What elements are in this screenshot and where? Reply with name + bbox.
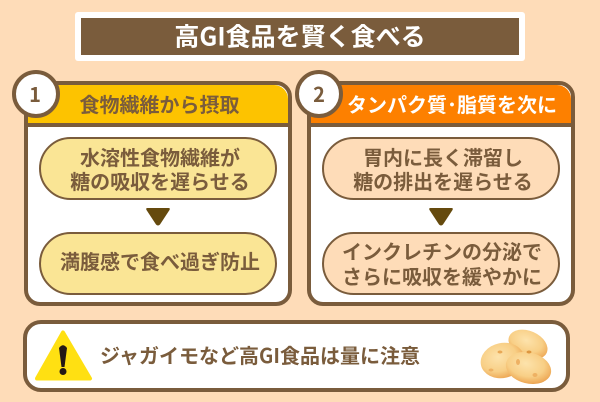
number badge 2 — [297, 72, 341, 116]
panel: protein and fat — [297, 72, 573, 304]
pill: soluble fiber — [40, 138, 276, 199]
panel header: protein and fat — [309, 85, 573, 127]
pill: stays in stomach: 糖の排出を遅らせる — [353, 166, 533, 195]
panel: dietary fiber — [14, 72, 290, 304]
pill: soluble fiber: 水溶性食物繊維が — [80, 142, 240, 171]
pill: soluble fiber: 糖の吸収を遅らせる — [70, 166, 250, 195]
pill: prevents overeating: 満腹感で食べ過ぎ防止 — [60, 246, 260, 275]
arrow down — [429, 208, 453, 226]
number badge 1: 1 — [29, 79, 41, 108]
panel header: protein and fat: タンパク質･脂質を次に — [347, 89, 557, 118]
pill: prevents overeating — [40, 233, 276, 294]
pill: stays in stomach — [323, 138, 559, 199]
number badge 1 — [14, 72, 58, 116]
panel header: dietary fiber — [26, 85, 290, 127]
pill: incretin secretion — [323, 233, 559, 294]
number badge 2: 2 — [313, 79, 325, 108]
caution text: ジャガイモなど高GI食品は量に注意 — [100, 340, 420, 369]
title — [75, 12, 525, 61]
panel: caution — [25, 322, 568, 390]
panel header: dietary fiber: 食物繊維から摂取 — [80, 89, 240, 118]
pill: stays in stomach: 胃内に長く滞留し — [363, 142, 523, 171]
icon: potatoes — [477, 324, 555, 389]
title: 高GI食品を賢く食べる — [174, 18, 426, 54]
pill: incretin secretion: インクレチンの分泌で — [342, 236, 542, 265]
icon: warning triangle — [37, 332, 90, 378]
arrow down — [146, 208, 170, 226]
pill: incretin secretion: さらに吸収を緩やかに — [342, 261, 542, 290]
